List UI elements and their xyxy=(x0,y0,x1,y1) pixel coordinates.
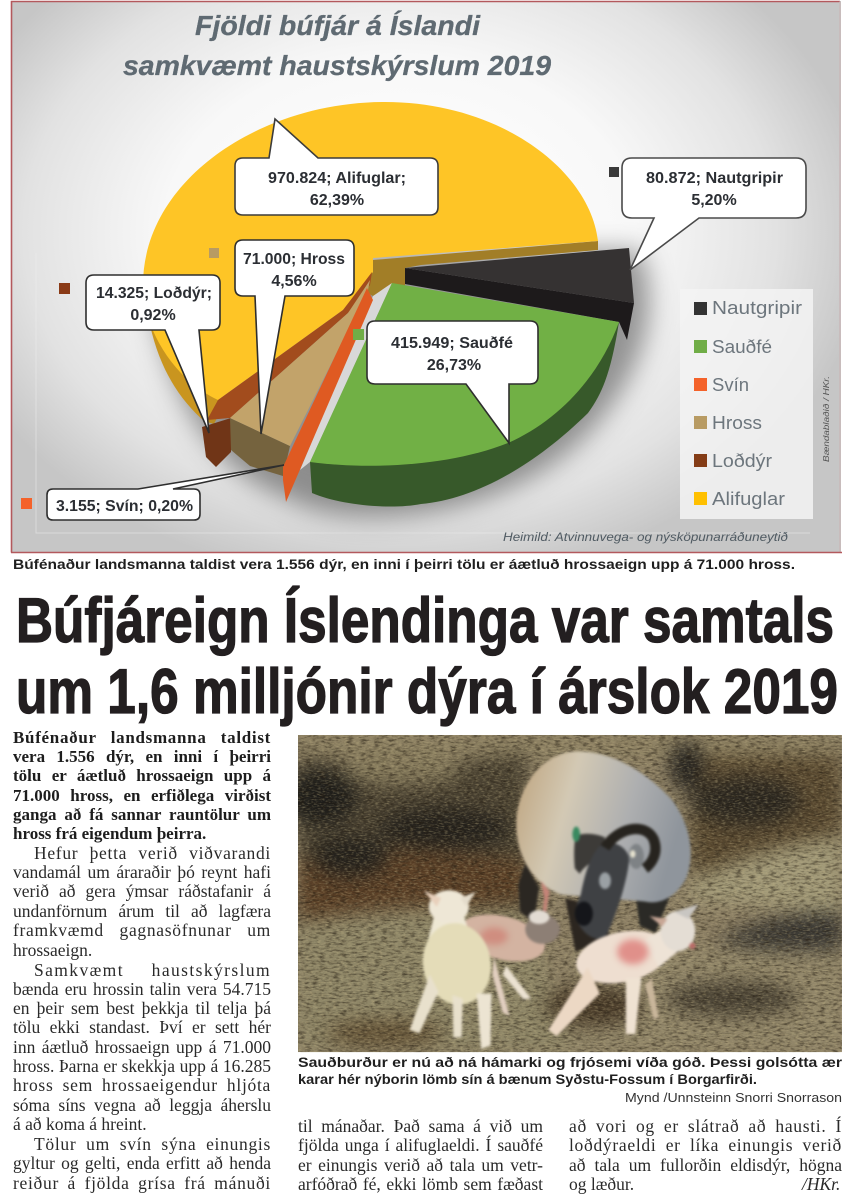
paragraph: Tölur xyxy=(13,1134,271,1193)
lead paragraph: 71.000 hross, en erfiðlega virðist xyxy=(13,786,271,805)
chart title: samkvæmt haustskýrslum 2019 xyxy=(123,50,551,81)
callout: Sauðfé xyxy=(367,321,538,443)
paragraph: Hefur: hrossaeign. xyxy=(13,940,92,960)
legend: Svín xyxy=(712,375,749,395)
paragraph: Hefur: undanförnum árum til að lagfæra xyxy=(13,901,271,921)
paragraph: Tölur: Tölur um svín sýna einungis xyxy=(34,1134,271,1154)
chart source: Heimild: Atvinnuvega- og nýsköpunarráðuneytið xyxy=(503,530,788,544)
callout: Alifuglar: 62,39% xyxy=(310,192,364,209)
lead paragraph: ganga að fá sannar rauntölur um xyxy=(13,805,271,824)
article column 2: er einungis verið að tala um vetr- xyxy=(298,1155,543,1175)
panel: pie chart xyxy=(11,1,842,553)
pie slice: Nautgripir xyxy=(405,248,634,340)
article column 2 xyxy=(298,1116,543,1194)
lead paragraph: tölu er áætluð hrossaeign upp á xyxy=(13,766,271,785)
pie slice: Sauðfé xyxy=(310,283,619,507)
article column 2: arfóðrað fé, ekki lömb sem fæðast xyxy=(298,1174,543,1194)
photo: ewe and three lambs xyxy=(281,735,842,1052)
chart credit: Bændablaðið / HKr. xyxy=(821,376,831,462)
callout: Loðdýr xyxy=(86,275,220,433)
paragraph: Tölur: gyltur og gelti, enda erfitt að henda xyxy=(13,1153,271,1173)
article column 3: og læður. xyxy=(569,1174,634,1194)
callout: Loðdýr: 14.325; Loðdýr; xyxy=(96,285,212,302)
paragraph: Samkvæmt: inn áætluð hrossaeign upp á 71.000 xyxy=(13,1037,271,1057)
pie slice: Alifuglar xyxy=(143,102,598,424)
legend: Nautgripir xyxy=(712,298,802,318)
paragraph: Hefur: verið að gera ýmsar ráðstafanir á xyxy=(13,881,271,901)
paragraph: Hefur xyxy=(13,843,271,960)
paragraph: Hefur: vandamál um áraraðir þó reynt hafi xyxy=(13,862,271,882)
ewe xyxy=(516,751,691,952)
paragraph: Hefur: framkvæmd gagnasöfnunar um xyxy=(13,920,271,940)
chart title: Fjöldi búfjár á Íslandi xyxy=(195,10,481,41)
callout: Alifuglar: 970.824; Alifuglar; xyxy=(268,170,406,187)
pie slice: Hross xyxy=(230,280,370,476)
legend: Alifuglar xyxy=(712,489,785,509)
pie slice: Svín xyxy=(283,288,373,502)
callout: Hross xyxy=(235,240,354,434)
paragraph: Samkvæmt xyxy=(13,960,271,1134)
photo credit: Mynd /Unnsteinn Snorri Snorrason xyxy=(625,1091,842,1105)
article column 3: að vori og er slátrað að hausti. Í xyxy=(569,1116,842,1136)
legend xyxy=(680,289,813,519)
article column 3: loðdýraeldi er líka einungis verið xyxy=(569,1135,842,1155)
article column 3: að tala um fullorðin eldisdýr, högna xyxy=(569,1155,842,1175)
headline xyxy=(16,586,838,727)
callout: Nautgripir: 5,20% xyxy=(691,192,737,209)
paragraph: Hefur: Hefur þetta verið viðvarandi xyxy=(34,843,271,863)
chart title xyxy=(123,10,551,81)
callout: Sauðfé: 26,73% xyxy=(427,357,481,374)
article column 3 xyxy=(569,1116,842,1194)
paragraph: Samkvæmt: sóma síns vegna að leggja áherslu xyxy=(13,1095,271,1115)
paragraph: Samkvæmt: en þeir sem best þekkja til telja þá xyxy=(13,998,271,1018)
callout: Svín xyxy=(47,465,284,520)
paragraph: Samkvæmt: Samkvæmt haustskýrslum xyxy=(34,960,271,980)
data markers xyxy=(21,167,619,509)
legend: Hross xyxy=(712,413,762,433)
chart caption: Búfénaður landsmanna taldist vera 1.556 dýr, en inni í þeirri tölu er áætluð hrossaeign upp á 71.000 hross. xyxy=(13,557,795,572)
pie shadow xyxy=(150,250,650,517)
paragraph: Samkvæmt: hross. Þarna er skekkja upp á 16.285 xyxy=(13,1056,271,1076)
legend: Loðdýr xyxy=(712,451,772,471)
callout: Alifuglar xyxy=(235,119,438,215)
article column 1 xyxy=(13,728,271,1193)
callout: Nautgripir: 80.872; Nautgripir xyxy=(646,170,783,187)
callout: Hross: 71.000; Hross xyxy=(243,251,345,268)
light gap between slices xyxy=(300,283,392,470)
article column 3: /HKr. xyxy=(802,1174,840,1194)
callout: Loðdýr: 0,92% xyxy=(130,307,176,324)
paragraph: Samkvæmt: tölu ekki standast. Því er sett hér xyxy=(13,1017,271,1037)
lead paragraph xyxy=(13,728,271,843)
callout: Nautgripir xyxy=(622,158,806,270)
lead paragraph: hross frá eigendum þeirra. xyxy=(13,824,206,843)
legend: Sauðfé xyxy=(712,337,772,357)
photo caption xyxy=(298,1055,842,1087)
article column 2: til mánaðar. Það sama á við um xyxy=(298,1116,543,1136)
pie slice: Loðdýr xyxy=(202,272,372,467)
photo caption: Sauðburður er nú að ná hámarki og frjósemi víða góð. Þessi golsótta ær xyxy=(298,1055,842,1070)
callout: Svín: 3.155; Svín; 0,20% xyxy=(56,498,193,515)
paragraph: Samkvæmt: hross sem hrossaeigendur hljóta xyxy=(13,1075,271,1095)
lamb: left, cream xyxy=(410,890,497,1049)
grass background xyxy=(281,735,842,1052)
lamb: right, red-marked xyxy=(548,904,699,1036)
lamb: behind, pink xyxy=(455,907,560,1016)
callout: Sauðfé: 415.949; Sauðfé xyxy=(391,335,513,352)
paragraph: Tölur: reiður á fjölda grísa frá mánuði xyxy=(13,1173,271,1193)
paragraph: Samkvæmt: bænda eru hrossin talin vera 54.715 xyxy=(13,979,271,999)
photo caption: karar hér nýborin lömb sín á bænum Syðstu-Fossum í Borgarfirði. xyxy=(298,1072,757,1087)
article column 2: fjölda unga í alifuglaeldi. Í sauðfé xyxy=(298,1135,543,1155)
callout: Hross: 4,56% xyxy=(271,273,317,290)
lead paragraph: Búfénaður landsmanna taldist xyxy=(13,728,271,747)
paragraph: Samkvæmt: á að koma á hreint. xyxy=(13,1114,147,1134)
lead paragraph: vera 1.556 dýr, en inni í þeirri xyxy=(13,747,271,766)
